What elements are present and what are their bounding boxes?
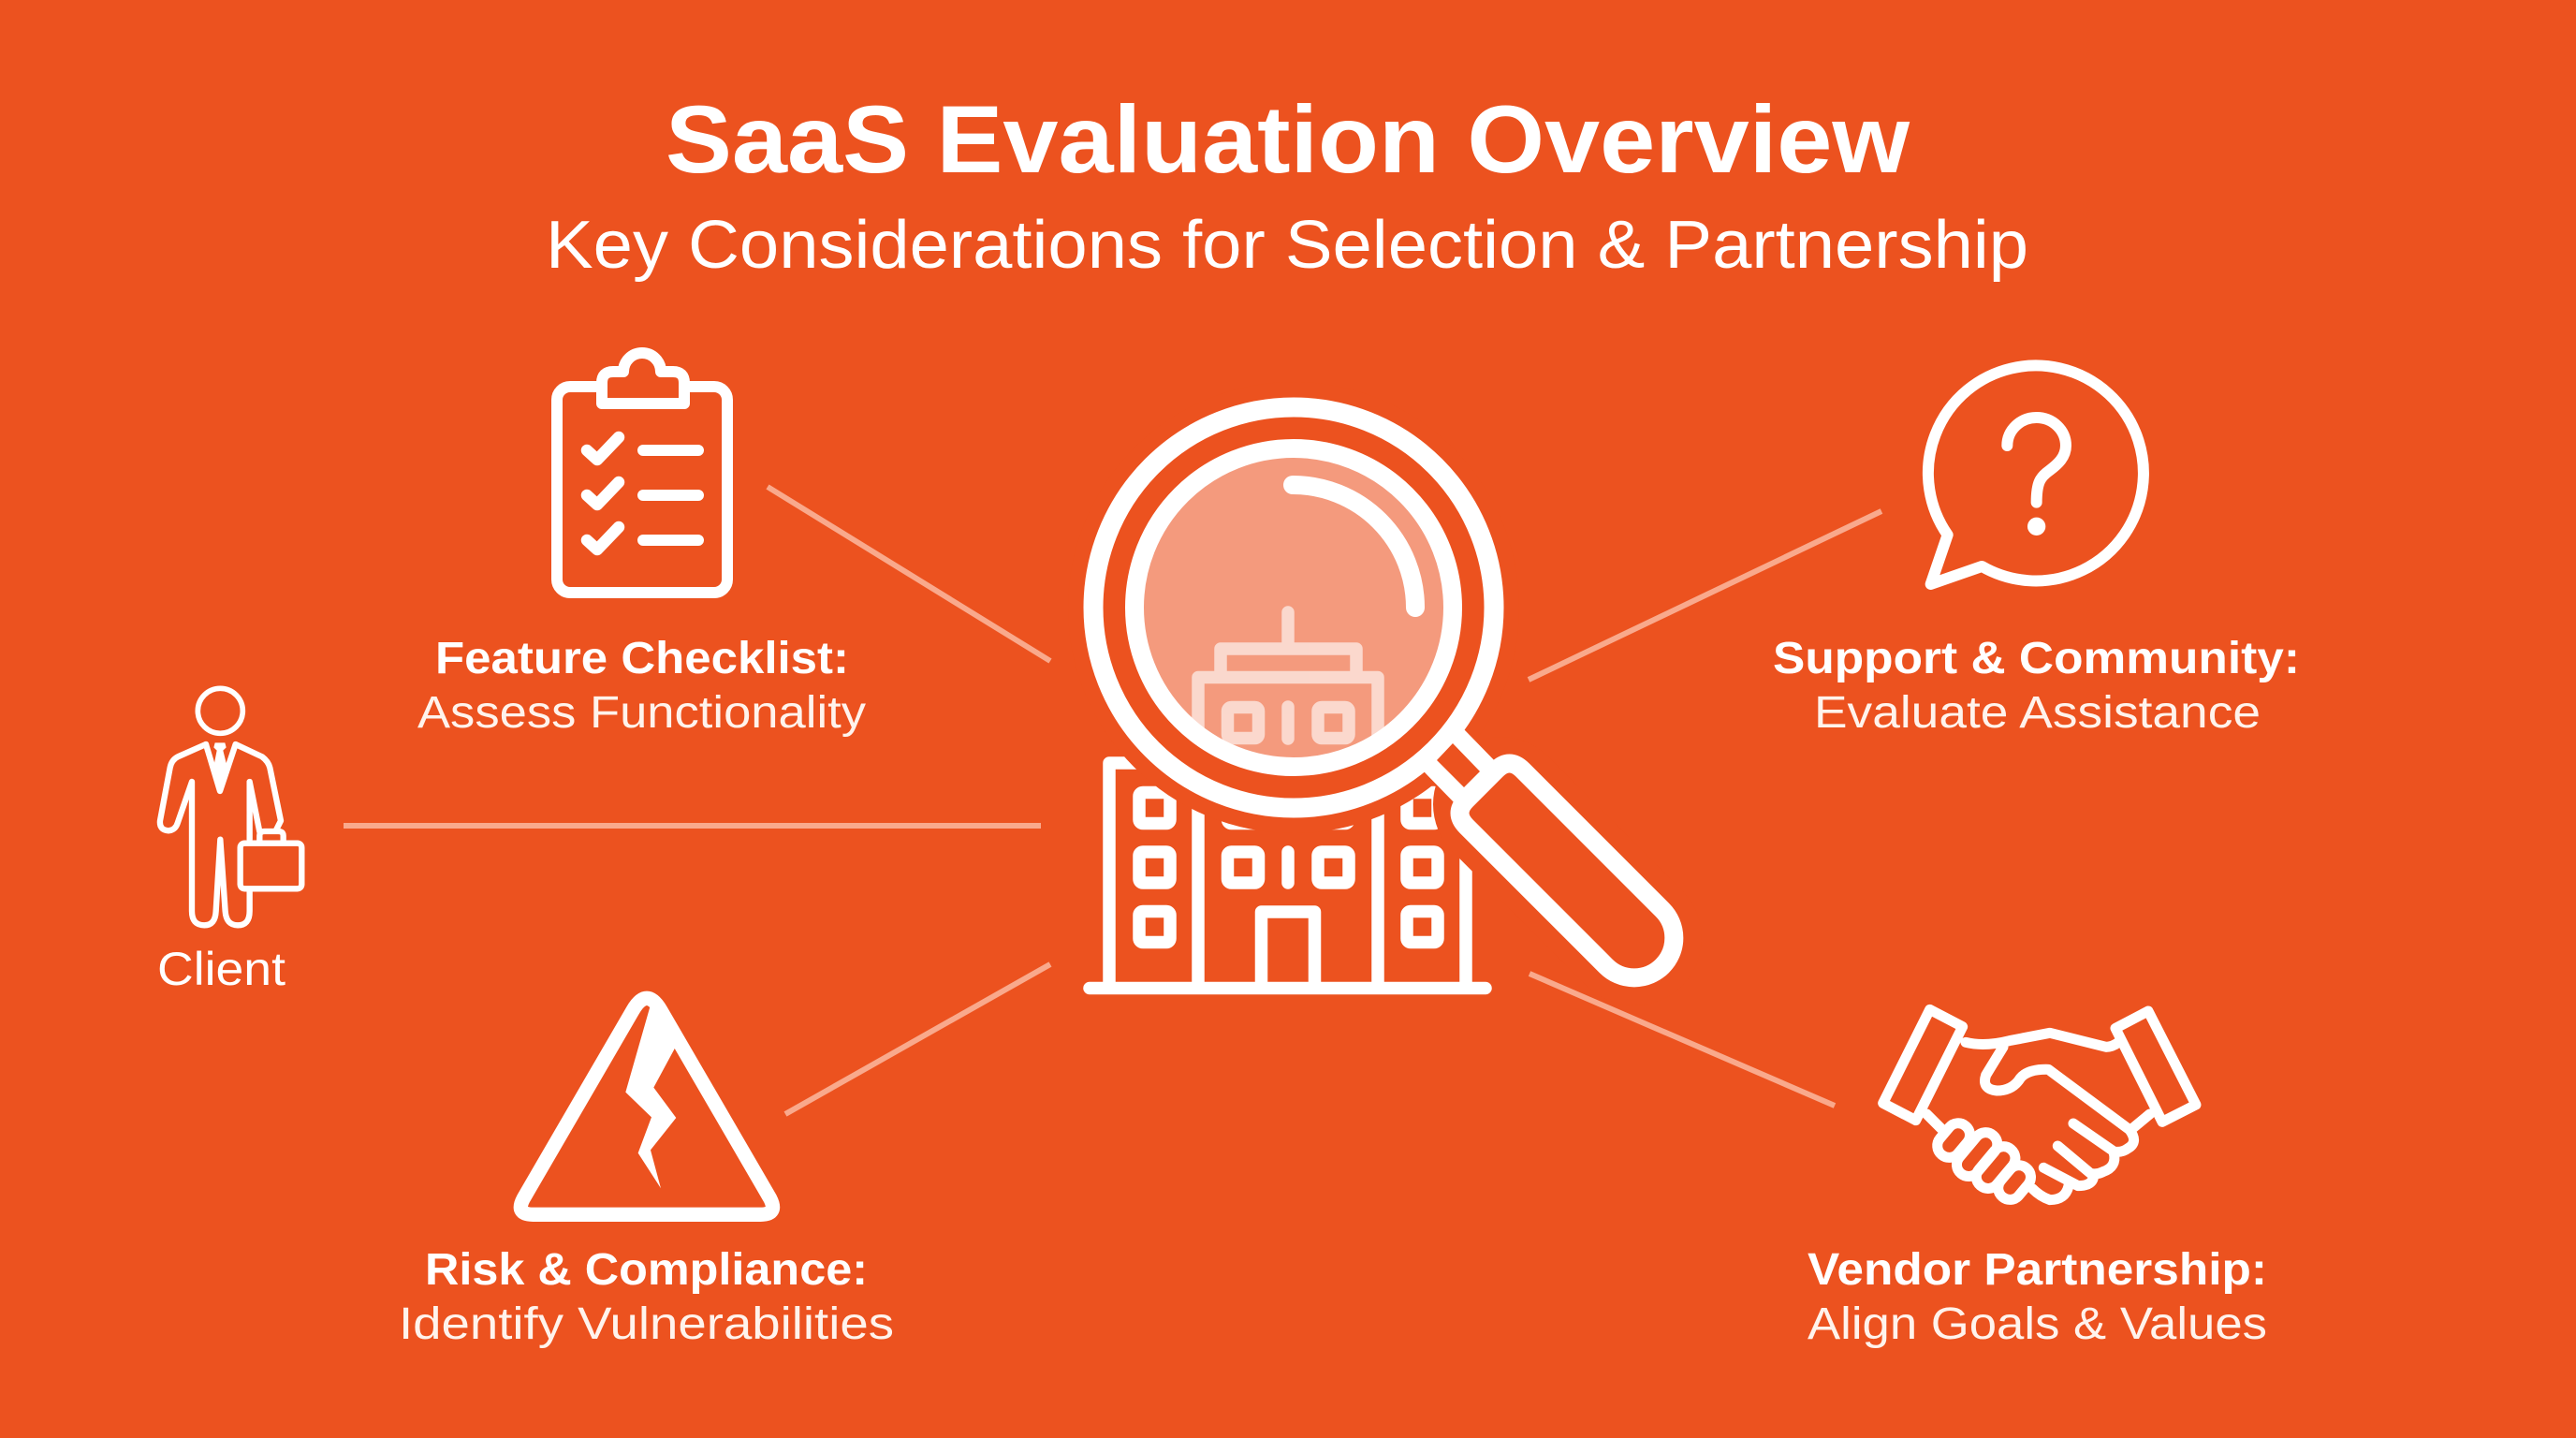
icon: magnifying glass (1093, 407, 1690, 994)
label: feature checklist: Assess Functionality (417, 688, 866, 738)
label: risk and compliance: Identify Vulnerabilities (399, 1299, 894, 1349)
title: SaaS Evaluation Overview (666, 86, 1910, 193)
label: support and community (1773, 634, 2300, 738)
subtitle: Key Considerations for Selection & Partnership (546, 208, 2028, 283)
label: risk and compliance: Risk & Compliance: (425, 1245, 868, 1295)
label: support and community: Support & Community: (1773, 634, 2300, 683)
central icon: building under magnifying glass (1068, 382, 1690, 994)
label: vendor partnership: Align Goals & Values (1808, 1299, 2267, 1349)
label: vendor partnership: Vendor Partnership: (1808, 1245, 2267, 1295)
label: vendor partnership (1808, 1245, 2267, 1349)
label: risk and compliance (399, 1245, 894, 1349)
label: feature checklist: Feature Checklist: (435, 634, 849, 683)
icon: office building (1090, 763, 1486, 989)
connector lines (344, 487, 1881, 1114)
label: feature checklist (417, 634, 866, 738)
icon: client with briefcase (160, 688, 301, 925)
icon: speech bubble question (1928, 365, 2144, 584)
label: client: Client (157, 943, 285, 995)
icon: handshake (1883, 1009, 2196, 1204)
icon: warning triangle with crack (520, 998, 773, 1214)
magnified building (1198, 612, 1378, 758)
label: support and community: Evaluate Assistance (1814, 688, 2261, 738)
icon: clipboard checklist (557, 353, 727, 593)
